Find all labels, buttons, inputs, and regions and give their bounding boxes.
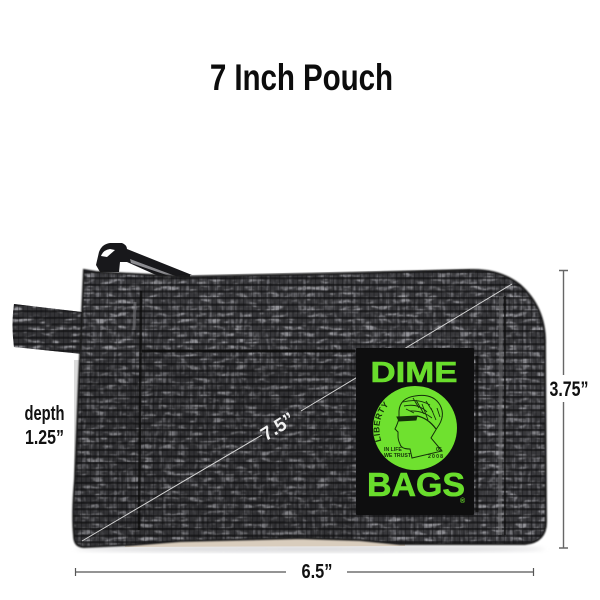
height dimension: [550, 270, 588, 548]
width dimension: [76, 561, 534, 583]
coin: WE TRUST: [384, 453, 412, 459]
coin portrait: [395, 395, 442, 458]
coin: 05: [436, 447, 442, 453]
height value: 3.75”: [550, 378, 588, 401]
side tab: [12, 304, 82, 354]
coin: IN LIFE: [384, 447, 402, 453]
coin inscriptions: LIBERTY: [374, 401, 388, 442]
coin: 2008: [428, 454, 443, 460]
fabric body: [73, 270, 546, 547]
depth label: 1.25”: [25, 427, 64, 449]
pouch: [12, 243, 546, 552]
diagonal dimension line: [82, 284, 512, 541]
coin: [373, 386, 457, 470]
bottom canvas edge: [125, 534, 405, 547]
depth label: [24, 403, 64, 449]
label wordmark bottom: BAGS: [367, 466, 465, 503]
pocket seams: [134, 291, 505, 535]
label background: [356, 348, 474, 515]
shading: [74, 360, 355, 538]
ground shadow: [75, 546, 545, 552]
diagonal dimension label: 7.5”: [257, 409, 299, 446]
label wordmark top: DIME: [370, 357, 458, 389]
width value: 6.5”: [302, 561, 332, 583]
title: 7 Inch Pouch: [210, 58, 393, 99]
registered mark: ®: [460, 497, 466, 505]
brand label: [356, 348, 474, 515]
zipper pull: [96, 243, 470, 281]
depth label: depth: [24, 403, 64, 425]
